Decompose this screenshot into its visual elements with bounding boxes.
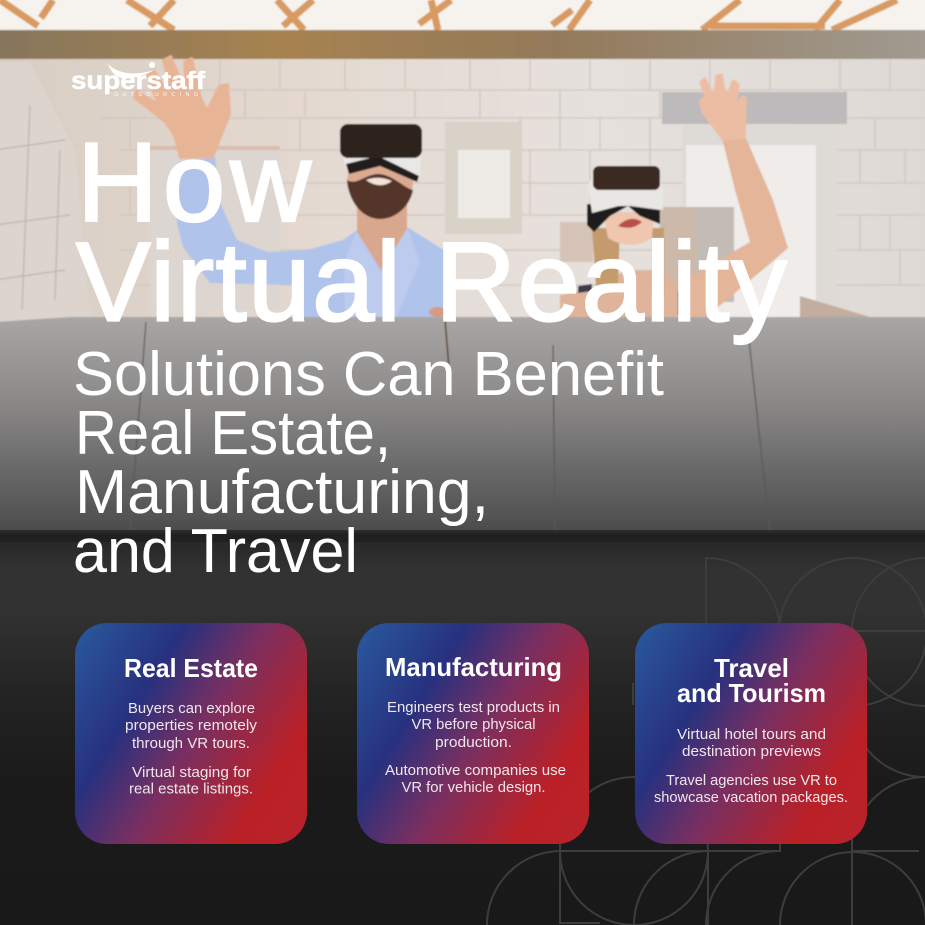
- box seams: [130, 320, 770, 533]
- card body text: Virtual staging for: [132, 765, 251, 781]
- faded left window: [150, 150, 280, 310]
- man's shirt: [177, 157, 447, 318]
- woman's chest and left arm: [560, 270, 682, 318]
- woman's VR headset: [587, 166, 663, 232]
- man's beard: [347, 174, 413, 219]
- card body text: showcase vacation packages.: [654, 790, 848, 806]
- wedge at right: [800, 296, 880, 320]
- woman's face: [603, 212, 654, 245]
- panel: Travel and Tourism: [635, 623, 867, 844]
- card body text: [125, 701, 258, 798]
- logo swoosh: [108, 62, 155, 78]
- subtitle line four: and Travel: [73, 517, 358, 586]
- logo wordmark: superstaff: [71, 67, 206, 95]
- card body text: real estate listings.: [129, 782, 253, 798]
- woman's striped top: [578, 284, 690, 315]
- card body text: destination previews: [682, 744, 821, 760]
- man's VR headset: [340, 124, 422, 182]
- title: How Virtual Reality: [76, 120, 787, 344]
- SuperStaff logo: [71, 62, 206, 98]
- wall mortar lines: [100, 60, 925, 285]
- card body text: through VR tours.: [132, 736, 250, 752]
- card body text: Virtual hotel tours and: [677, 727, 826, 743]
- card body text: Engineers test products in: [387, 700, 560, 716]
- card background: [75, 623, 307, 844]
- foreground cardboard boxes: [0, 317, 925, 533]
- card body text: Automotive companies use: [385, 763, 566, 779]
- grey wall patch: [662, 92, 847, 124]
- background photo: two people in VR headsets: [0, 0, 925, 533]
- card body text: [654, 727, 848, 806]
- man's face: [347, 154, 413, 210]
- man's shirt placket: [344, 227, 420, 318]
- card heading: [677, 653, 826, 708]
- man's hand on box: [429, 307, 447, 317]
- concrete beam: [0, 30, 925, 59]
- man's smile: [366, 178, 392, 185]
- roof trusses: [0, 0, 897, 30]
- card body text: production.: [435, 735, 512, 751]
- card background: [357, 623, 589, 844]
- card body text: VR for vehicle design.: [402, 780, 546, 796]
- man's neck: [357, 200, 407, 270]
- title line one: How: [77, 120, 312, 245]
- geometric background line pattern: [487, 558, 925, 925]
- woman's hand: [700, 74, 746, 140]
- right window: [682, 125, 837, 317]
- subtitle line two: Real Estate,: [75, 399, 391, 468]
- card heading: Manufacturing: [385, 652, 562, 682]
- left angled wall: [0, 62, 90, 325]
- woman's arm: [680, 136, 788, 318]
- card heading: and Tourism: [677, 678, 826, 708]
- sky and roof opening: [0, 0, 925, 32]
- brick wall: [0, 59, 925, 324]
- title line two: Virtual Reality: [76, 220, 787, 344]
- woman's hair: [592, 228, 664, 294]
- subtitle line three: Manufacturing,: [75, 458, 489, 527]
- shadow at the bottom of the photo: [0, 530, 925, 542]
- beige panel behind woman: [660, 207, 696, 302]
- subtitle: [73, 340, 664, 586]
- card heading: Travel: [714, 653, 789, 683]
- card background: [635, 623, 867, 844]
- card body text: properties remotely: [125, 718, 258, 734]
- man's raised hand: [134, 56, 230, 158]
- dark page background: [0, 530, 925, 925]
- card body text: VR before physical: [412, 717, 536, 733]
- card heading: Real Estate: [124, 653, 258, 683]
- logo tagline: OUTSOURCING: [114, 92, 198, 98]
- centre window: [445, 122, 522, 234]
- card body text: Buyers can explore: [128, 701, 255, 717]
- card body text: [385, 700, 566, 796]
- panel: Manufacturing: [357, 623, 589, 844]
- woman's mouth: [618, 219, 642, 228]
- panel: Real Estate: [75, 623, 307, 844]
- card body text: Travel agencies use VR to: [666, 773, 837, 789]
- subtitle line one: Solutions Can Benefit: [73, 340, 664, 409]
